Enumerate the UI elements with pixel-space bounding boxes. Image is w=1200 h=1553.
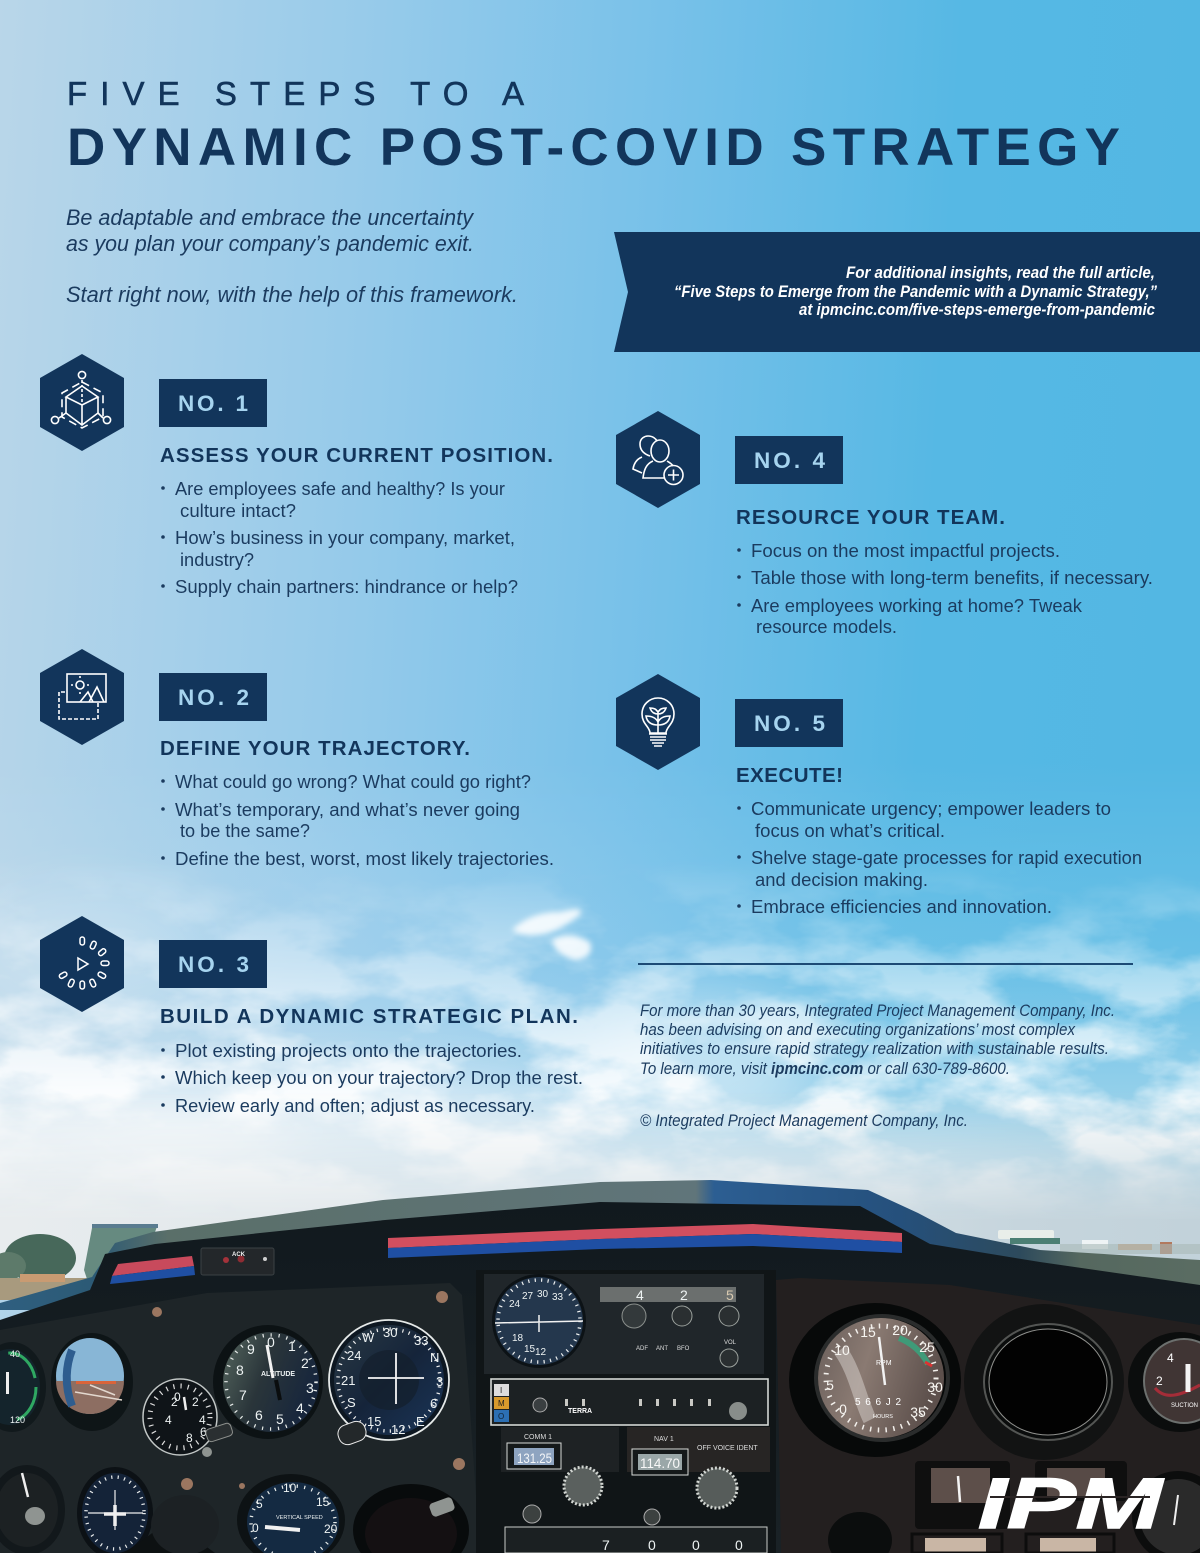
radio stack: ANT — [656, 1346, 668, 1352]
gauge: altimeter: 6 — [255, 1407, 263, 1423]
ribbon callout: For additional insights, read the full article, — [846, 264, 1155, 282]
ribbon callout: at ipmcinc.com/five-steps-emerge-from-pandemic — [799, 301, 1155, 319]
title: DYNAMIC POST-COVID STRATEGY — [67, 118, 1120, 177]
right panel — [776, 1278, 1200, 1553]
bullet list — [737, 540, 1153, 637]
gauge: HSI: 3 — [436, 1374, 443, 1389]
about text: has been advising on and executing organizations’ most complex — [640, 1021, 1076, 1039]
screws — [152, 1291, 465, 1490]
heading: RESOURCE YOUR TEAM. — [736, 506, 1005, 529]
radio stack: 0 — [648, 1537, 656, 1553]
gauge: altimeter: 7 — [239, 1387, 247, 1403]
small engine gauges — [828, 1461, 1127, 1553]
gauge: RPM tachometer: 30 — [927, 1379, 943, 1395]
gauge: RPM tachometer: 15 — [860, 1324, 876, 1340]
switch box: ACK — [232, 1252, 246, 1258]
about text: initiatives to ensure rapid strategy realization with sustainable results. — [640, 1040, 1109, 1058]
bullet list: and decision making. — [755, 869, 928, 890]
copyright: © Integrated Project Management Company, Inc. — [640, 1112, 968, 1130]
number badge — [159, 379, 267, 427]
gauge: altimeter — [213, 1325, 323, 1439]
gauge: blank lower — [353, 1484, 469, 1553]
gauge: RPM tachometer: 25 — [919, 1339, 935, 1355]
bullet list: Embrace efficiencies and innovation. — [751, 896, 1052, 917]
switch box — [201, 1248, 274, 1275]
bullet list — [161, 771, 554, 869]
radio stack: 7 — [602, 1537, 610, 1553]
gauge: turn coordinator: 0 — [174, 1390, 181, 1404]
bullet list: Table those with long-term benefits, if necessary. — [751, 567, 1153, 588]
bullet list: Communicate urgency; empower leaders to — [751, 798, 1111, 819]
gauge: HSI: 24 — [347, 1348, 361, 1363]
panel: step 1 — [40, 354, 553, 597]
gauge: RPM tachometer — [789, 1303, 961, 1457]
gauge: HSI: 15 — [367, 1414, 381, 1429]
gauge: HSI: 12 — [391, 1422, 405, 1437]
gauge: vertical speed: 10 — [283, 1481, 297, 1495]
gauge: HSI: 30 — [383, 1325, 397, 1340]
bullet list: to be the same? — [180, 820, 310, 841]
number badge — [159, 673, 267, 721]
gauge: airspeed: 40 — [10, 1349, 20, 1359]
gauge: RPM tachometer: RPM — [876, 1360, 892, 1367]
about text: To learn more, visit ipmcinc.com or call 630-789-8600. — [640, 1060, 1010, 1078]
gauge: RPM tachometer: 20 — [892, 1322, 908, 1338]
gauge: vertical speed: 0 — [252, 1521, 259, 1535]
radio stack: VOL — [724, 1340, 737, 1346]
radio stack — [476, 1270, 776, 1553]
radio stack: 4 — [636, 1287, 644, 1303]
gauge: airspeed — [0, 1342, 46, 1432]
number badge: NO. 1 — [178, 391, 248, 416]
heading: ASSESS YOUR CURRENT POSITION. — [160, 444, 553, 467]
ribbon callout — [614, 232, 1200, 352]
gauge: altimeter: 1 — [288, 1338, 296, 1354]
dash body — [0, 1202, 1200, 1553]
bullet list: Are employees working at home? Tweak — [751, 595, 1083, 616]
about text — [640, 1002, 1115, 1078]
gauge: directional gyro — [77, 1467, 153, 1553]
horizon scenery — [0, 1224, 1200, 1300]
gauge: vertical speed: 5 — [256, 1497, 263, 1511]
gauge: vertical speed: 20 — [324, 1522, 338, 1536]
gauge: vertical speed: 15 — [316, 1495, 330, 1509]
bullet list: How’s business in your company, market, — [175, 527, 515, 548]
gauge: suction — [1128, 1332, 1200, 1432]
gauge: ADF: 24 — [509, 1299, 521, 1310]
number badge: NO. 2 — [178, 685, 249, 710]
bullet list: resource models. — [756, 616, 897, 637]
gauge: ADF: 33 — [552, 1292, 564, 1303]
radio stack: O — [498, 1412, 504, 1421]
cockpit dashboard photo — [0, 1180, 1200, 1553]
intro text: Start right now, with the help of this framework. — [66, 282, 518, 307]
gauge: altimeter: 5 — [276, 1411, 284, 1427]
ribbon callout: “Five Steps to Emerge from the Pandemic with a Dynamic Strategy,” — [674, 283, 1158, 301]
gauge: ammeter — [1132, 1471, 1200, 1553]
icon: image hexagon — [40, 649, 124, 745]
intro text — [66, 205, 518, 307]
bullet list: What could go wrong? What could go right? — [175, 771, 531, 792]
panel: step 5 — [616, 674, 1142, 917]
number badge: NO. 5 — [754, 711, 825, 736]
radio stack: 131.25 — [517, 1450, 552, 1466]
gauge: turn coordinator — [143, 1379, 234, 1457]
gauge: turn coordinator: 8 — [186, 1431, 193, 1445]
intro text: Be adaptable and embrace the uncertainty — [66, 205, 475, 230]
panel: step 4 — [616, 411, 1153, 637]
gauge: HSI: N — [430, 1350, 439, 1365]
bullet list: Supply chain partners: hindrance or help? — [175, 576, 518, 597]
gauge: HSI: E — [416, 1414, 425, 1429]
gauge: HSI: 33 — [414, 1333, 428, 1348]
gauge: suction: 2 — [1156, 1374, 1163, 1388]
gauge: altimeter: 0 — [267, 1334, 275, 1350]
gauge: altimeter: 9 — [247, 1341, 255, 1357]
number badge — [159, 940, 267, 988]
bullet list: Plot existing projects onto the trajectories. — [175, 1040, 522, 1061]
gauge: RPM tachometer: 5 6 6 J 2 — [855, 1397, 901, 1408]
panel: step 3 — [40, 916, 583, 1116]
gauge: ADF — [492, 1274, 586, 1368]
radio stack: COMM 1 — [524, 1434, 552, 1441]
gauge: altimeter: 3 — [306, 1380, 314, 1396]
bullet list: Review early and often; adjust as necessary. — [175, 1095, 535, 1116]
dash coping — [0, 1180, 1200, 1310]
about text: For more than 30 years, Integrated Project Management Company, Inc. — [640, 1002, 1115, 1020]
gauge: attitude indicator — [51, 1333, 133, 1431]
radio stack: BFO — [677, 1346, 690, 1352]
radio stack: 2 — [680, 1287, 688, 1303]
icon: cube hexagon — [40, 354, 124, 451]
bullet list: culture intact? — [180, 500, 296, 521]
bullet list: Shelve stage-gate processes for rapid execution — [751, 847, 1142, 868]
gauge: RPM tachometer: 10 — [834, 1342, 850, 1358]
gauge: RPM tachometer: 0 — [839, 1401, 847, 1417]
gauge: HSI: W — [362, 1330, 375, 1345]
icon: play hexagon — [40, 916, 124, 1012]
gauge: empty dark — [964, 1304, 1124, 1460]
radio stack: NAV 1 — [654, 1436, 674, 1443]
gauge: ADF: 15 — [524, 1344, 536, 1355]
gauge: altimeter: 8 — [236, 1362, 244, 1378]
title — [67, 75, 1120, 177]
logo: IPM: IPM — [978, 1465, 1165, 1544]
gauge: ADF: 27 — [522, 1291, 534, 1302]
heading: EXECUTE! — [736, 764, 843, 787]
heading: DEFINE YOUR TRAJECTORY. — [160, 737, 470, 760]
left panel — [0, 1283, 480, 1553]
icon: bulb hexagon — [616, 674, 700, 770]
gauge: turn coordinator: 2 — [192, 1395, 199, 1409]
radio stack: 0 — [692, 1537, 700, 1553]
intro text: as you plan your company’s pandemic exit. — [66, 231, 474, 256]
bullet list: Define the best, worst, most likely trajectories. — [175, 848, 554, 869]
gauge: altimeter: 2 — [301, 1355, 309, 1371]
radio stack: OFF VOICE IDENT — [697, 1445, 758, 1452]
gauge: HSI: 6 — [430, 1396, 437, 1411]
number badge: NO. 4 — [754, 448, 825, 473]
panel: step 2 — [40, 649, 554, 869]
heading: BUILD A DYNAMIC STRATEGIC PLAN. — [160, 1005, 578, 1028]
radio stack: 114.70 — [640, 1455, 680, 1471]
radio stack: 5 — [726, 1287, 734, 1303]
gauge: turn coordinator: 2 — [171, 1395, 178, 1409]
gauge: turn coordinator: 6 — [200, 1425, 207, 1439]
gauge: suction: 4 — [1167, 1351, 1174, 1365]
radio stack: ADF — [636, 1346, 648, 1352]
bullet list — [737, 798, 1142, 917]
red and blue stripes — [110, 1224, 902, 1284]
gauge: vertical speed — [237, 1474, 345, 1553]
title: FIVE STEPS TO A — [67, 75, 524, 112]
gauge: RPM tachometer: 5 — [826, 1377, 834, 1393]
gauge: altimeter: 4 — [296, 1400, 304, 1416]
radio stack: I — [500, 1386, 502, 1395]
bullet list: Are employees safe and healthy? Is your — [175, 478, 505, 499]
number badge — [735, 699, 843, 747]
gauge: ADF: 18 — [512, 1333, 524, 1344]
gauge: airspeed: 120 — [10, 1415, 25, 1425]
number badge — [735, 436, 843, 484]
bullet list — [161, 1040, 583, 1116]
gauge: RPM tachometer: HOURS — [873, 1414, 893, 1420]
bullet list: Focus on the most impactful projects. — [751, 540, 1060, 561]
radio stack: 0 — [735, 1537, 743, 1553]
gauge: vertical speed: VERTICAL SPEED — [276, 1515, 323, 1521]
icon: team hexagon — [616, 411, 700, 508]
gauge: ADF: 12 — [535, 1347, 547, 1358]
gauge: suction: SUCTION — [1171, 1403, 1198, 1409]
radio stack: TERRA — [568, 1408, 592, 1415]
gauge: ADF: 30 — [537, 1289, 549, 1300]
gauge: HSI: S — [347, 1395, 356, 1410]
bullet list: industry? — [180, 549, 254, 570]
bullet list — [161, 478, 518, 597]
bullet list: Which keep you on your trajectory? Drop the rest. — [175, 1067, 583, 1088]
bullet list: focus on what’s critical. — [755, 820, 945, 841]
gauge: altimeter: ALTITUDE — [261, 1371, 295, 1378]
gauge: RPM tachometer: 35 — [910, 1404, 926, 1420]
bullet list: What’s temporary, and what’s never going — [175, 799, 520, 820]
gauge: suction lower left — [0, 1465, 65, 1553]
gauge: HSI — [329, 1320, 449, 1447]
throttle knob — [125, 1495, 219, 1553]
radio stack: M — [498, 1399, 505, 1408]
gauge: HSI: 21 — [341, 1373, 355, 1388]
gauge: turn coordinator: 4 — [199, 1413, 206, 1427]
number badge: NO. 3 — [178, 952, 249, 977]
gauge: turn coordinator: 4 — [165, 1413, 172, 1427]
